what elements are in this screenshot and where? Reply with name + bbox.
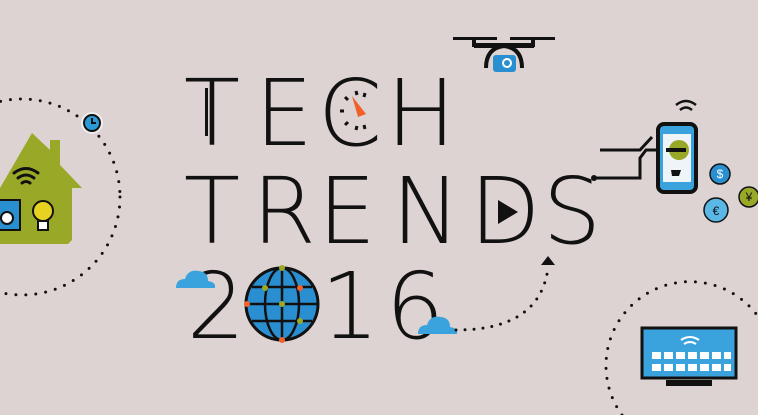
title: TECH: E <box>255 60 313 167</box>
icon: gauge <box>340 91 366 130</box>
dotted circle left <box>0 99 120 295</box>
icon: drone <box>453 37 555 72</box>
icon: globe <box>244 265 318 343</box>
title: TRENDS: S <box>543 158 601 265</box>
title: TRENDS: D <box>470 158 540 265</box>
title: TRENDS: R <box>252 158 316 265</box>
icon: coins: ¥ <box>745 190 753 204</box>
title: TECH <box>186 77 444 146</box>
icon: clock <box>81 112 103 134</box>
icon: cloud right <box>418 317 457 334</box>
icon: hand and phone <box>591 101 696 192</box>
title: TRENDS: N <box>392 158 460 265</box>
icon: coins <box>704 164 758 222</box>
icon: house <box>0 133 82 244</box>
title: TRENDS: E <box>318 158 376 265</box>
icon: play <box>498 200 518 224</box>
title: TECH: T <box>184 60 240 167</box>
panel: smart TV <box>606 282 758 415</box>
icon: coins: € <box>713 204 720 218</box>
title: TECH: C <box>318 60 382 167</box>
title: TECH: H <box>386 60 456 167</box>
title: TRENDS <box>186 175 594 244</box>
icon: cloud left <box>176 271 215 288</box>
title: 2016 <box>193 265 436 343</box>
panel: smart home <box>0 99 120 295</box>
title: TRENDS: T <box>184 158 240 265</box>
icon: coins: $ <box>717 167 724 181</box>
arrow: dotted curve <box>456 256 555 330</box>
title: 2016: 2 <box>187 253 245 360</box>
title: 2016: 6 <box>386 253 444 360</box>
title: 2016: 1 <box>321 253 379 360</box>
